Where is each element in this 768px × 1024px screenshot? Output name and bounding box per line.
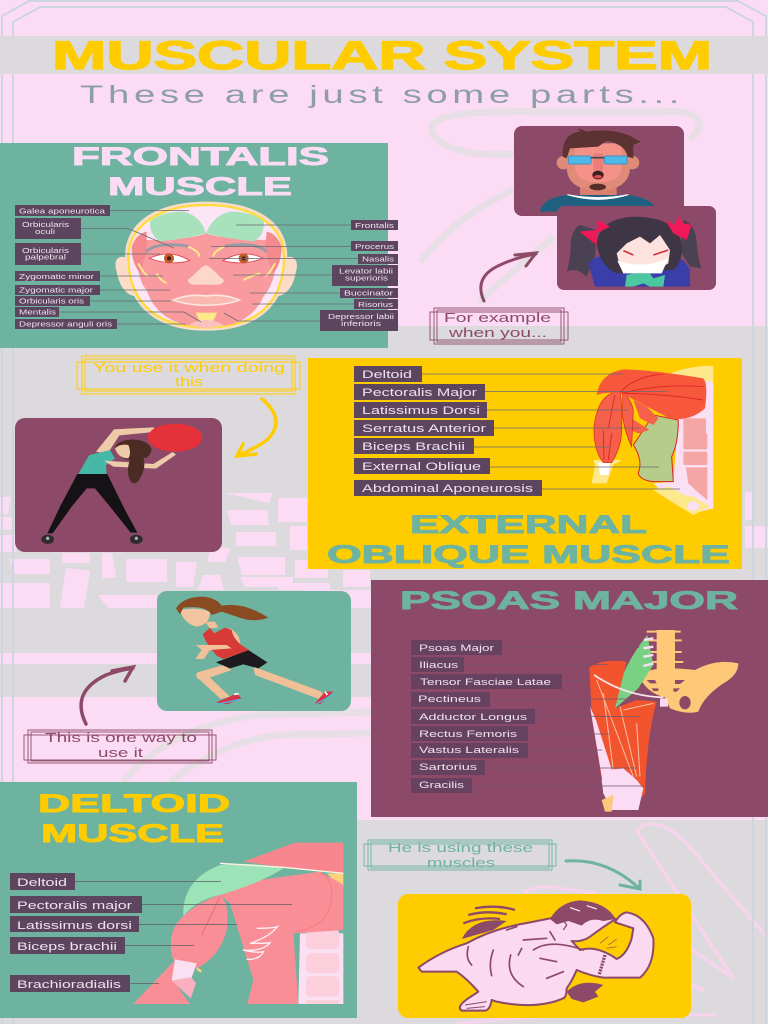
labels: face right bbox=[209, 220, 398, 331]
subtitle: These are just some parts... bbox=[80, 81, 684, 109]
callout: for example: when you... bbox=[447, 326, 547, 340]
callout: you use it: this bbox=[175, 375, 203, 389]
callout: for example: For example bbox=[444, 311, 551, 325]
callout: one way: This is one way to bbox=[45, 731, 197, 745]
labels: face left: Mentalis bbox=[19, 308, 56, 316]
heading: frontalis muscle: MUSCLE bbox=[108, 173, 292, 201]
labels: thigh muscles: Adductor Longus bbox=[419, 712, 527, 723]
labels: face left: oculi bbox=[35, 227, 55, 236]
panel: frontalis muscle bbox=[0, 143, 398, 348]
arrow: to flexing man bbox=[566, 861, 640, 889]
labels: thigh muscles: Sartorius bbox=[419, 762, 477, 773]
labels: arm muscles: Serratus Anterior bbox=[362, 423, 486, 435]
callout: for example bbox=[430, 308, 568, 344]
illustration: face muscles bbox=[115, 202, 297, 331]
heading: deltoid muscle: MUSCLE bbox=[41, 820, 224, 848]
title band: MUSCULAR SYSTEM bbox=[52, 34, 712, 78]
panel: annoyed anime girl bbox=[557, 206, 716, 290]
panel: stretching woman bbox=[15, 418, 222, 552]
illustration: hip and thigh muscles bbox=[589, 630, 738, 812]
labels: shoulder muscles: Pectoralis major bbox=[17, 900, 132, 912]
labels: face left bbox=[15, 205, 201, 329]
illustration: shoulder and arm muscles bbox=[133, 843, 343, 1004]
panel: man with glasses bbox=[514, 126, 684, 216]
labels: face left: Depressor anguli oris bbox=[19, 320, 112, 328]
labels: arm muscles: Abdominal Aponeurosis bbox=[362, 483, 534, 495]
labels: face right: Frontalis bbox=[355, 221, 394, 230]
labels: face left: Orbicularis bbox=[22, 220, 69, 229]
labels: face left: Galea aponeurotica bbox=[19, 206, 106, 216]
labels: thigh muscles: Pectineus bbox=[418, 694, 481, 705]
labels: shoulder muscles: Latissimus dorsi bbox=[17, 920, 132, 932]
panel: deltoid muscle bbox=[0, 782, 357, 1018]
panel: running woman bbox=[157, 591, 351, 711]
callout: using these muscles: He is using these bbox=[388, 841, 533, 855]
labels: arm muscles: Biceps Brachii bbox=[362, 441, 465, 453]
title band bbox=[0, 34, 768, 78]
labels: face right: superioris bbox=[345, 274, 388, 282]
arrow: to faces bbox=[481, 253, 536, 301]
labels: thigh muscles: Vastus Lateralis bbox=[419, 745, 519, 756]
callout: using these muscles bbox=[364, 840, 556, 870]
panel: flexing man bbox=[398, 894, 691, 1018]
labels: face left: Zygomatic major bbox=[19, 286, 94, 294]
labels: arm muscles: Pectoralis Major bbox=[362, 387, 477, 399]
labels: arm muscles: Deltoid bbox=[362, 369, 412, 381]
panel: psoas major bbox=[371, 580, 768, 817]
callout: one way: use it bbox=[98, 746, 144, 760]
callout: using these muscles: muscles bbox=[427, 856, 495, 870]
labels: face right: Risorius bbox=[358, 300, 393, 309]
labels: face right: Procerus bbox=[355, 242, 394, 251]
labels: shoulder muscles: Brachioradialis bbox=[17, 979, 122, 991]
illustration: torso and arm muscles bbox=[592, 366, 713, 515]
labels: arm muscles: Latissimus Dorsi bbox=[362, 405, 480, 417]
labels: thigh muscles bbox=[411, 640, 644, 793]
labels: face right: Buccinator bbox=[344, 288, 394, 298]
labels: face right: inferioris bbox=[341, 319, 381, 328]
heading: external oblique muscle bbox=[327, 511, 730, 569]
labels: face right: Nasalis bbox=[362, 254, 394, 264]
heading: external oblique muscle: EXTERNAL bbox=[410, 511, 647, 539]
heading: frontalis muscle: FRONTALIS bbox=[72, 143, 329, 171]
heading: external oblique muscle: OBLIQUE MUSCLE bbox=[327, 541, 730, 569]
labels: thigh muscles: Psoas Major bbox=[419, 643, 494, 654]
heading: deltoid muscle: DELTOID bbox=[38, 790, 230, 818]
labels: shoulder muscles: Biceps brachii bbox=[17, 941, 117, 953]
callout: one way bbox=[24, 730, 216, 763]
heading: deltoid muscle bbox=[38, 790, 230, 848]
labels: shoulder muscles bbox=[10, 873, 292, 992]
labels: arm muscles: External Oblique bbox=[362, 461, 481, 473]
labels: face right: Depressor labii bbox=[328, 312, 394, 321]
labels: face right: Levator labii bbox=[339, 266, 393, 276]
labels: face left: Orbicularis oris bbox=[19, 296, 84, 306]
heading: frontalis muscle bbox=[72, 143, 329, 201]
labels: face left: Orbicularis bbox=[22, 246, 69, 255]
callout: you use it bbox=[77, 356, 300, 394]
labels: face left: Zygomatic minor bbox=[19, 272, 95, 281]
labels: thigh muscles: Gracilis bbox=[419, 780, 464, 791]
labels: thigh muscles: Tensor Fasciae Latae bbox=[420, 677, 551, 688]
labels: thigh muscles: Rectus Femoris bbox=[419, 729, 517, 740]
labels: arm muscles bbox=[354, 366, 680, 496]
labels: shoulder muscles: Deltoid bbox=[17, 877, 67, 889]
labels: face left: palpebral bbox=[25, 252, 66, 262]
arrow: to running bbox=[81, 667, 133, 724]
callout: you use it: You use it when doing bbox=[93, 361, 285, 375]
heading: psoas major: PSOAS MAJOR bbox=[400, 587, 738, 615]
labels: thigh muscles: Iliacus bbox=[419, 660, 458, 671]
panel: external oblique muscle bbox=[308, 358, 742, 569]
arrow: to stretching bbox=[237, 399, 276, 456]
